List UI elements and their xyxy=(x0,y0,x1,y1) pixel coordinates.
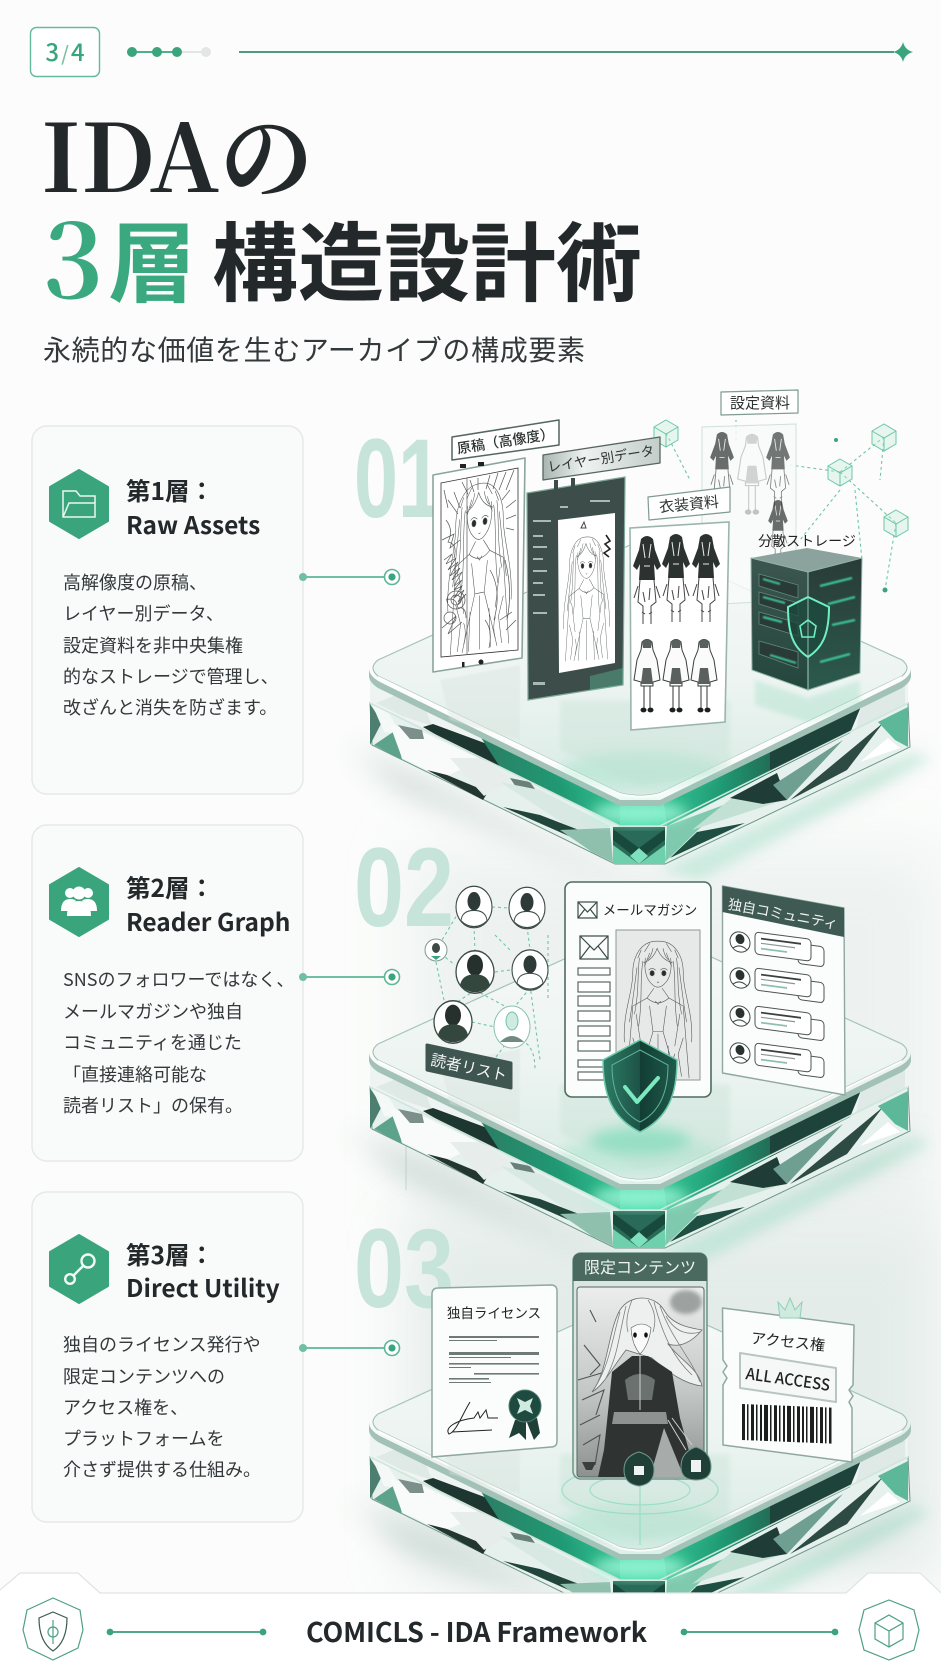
label: reader list: 読者リスト xyxy=(429,1048,509,1086)
title: 3 xyxy=(43,182,104,328)
illustration: layer 3 glass platform xyxy=(350,1297,930,1639)
card: limited content xyxy=(573,1253,711,1486)
panel: layer 3 description xyxy=(32,1192,303,1522)
body text: アクセス権を、 xyxy=(63,1394,188,1420)
body text: メールマガジンや独自 xyxy=(63,998,243,1024)
heading: Direct Utility xyxy=(126,1270,280,1305)
body text xyxy=(63,966,294,1118)
seal xyxy=(509,1390,541,1440)
icon: lock left xyxy=(624,1452,654,1486)
connector 3 xyxy=(299,1340,400,1356)
body text: 独自のライセンス発行や xyxy=(63,1331,261,1357)
label: costume sheet: 衣装資料 xyxy=(658,491,720,517)
heading xyxy=(126,1237,280,1305)
body text: 的なストレージで管理し、 xyxy=(63,663,279,689)
body text: 設定資料を非中央集権 xyxy=(63,632,243,658)
footer band xyxy=(0,1573,941,1672)
heading: Raw Assets xyxy=(126,507,260,542)
body text xyxy=(63,569,279,720)
card: community: 独自コミュニティ xyxy=(727,894,839,934)
number 02: 02 xyxy=(354,825,454,950)
header rule with star xyxy=(239,42,913,62)
icon: people xyxy=(50,868,108,936)
heading xyxy=(126,870,290,939)
card: limited content: 限定コンテンツ xyxy=(584,1254,696,1278)
heading: 第3層： xyxy=(126,1237,214,1272)
body text: レイヤー別データ、 xyxy=(63,600,224,626)
body text: SNSのフォロワーではなく、 xyxy=(63,966,294,992)
icon: cube badge xyxy=(859,1600,919,1660)
progress dots xyxy=(127,47,211,57)
illustration: layer 1 glass platform xyxy=(350,543,930,885)
rule right xyxy=(681,1629,838,1635)
icon: link xyxy=(50,1235,108,1303)
body text: 限定コンテンツへの xyxy=(63,1363,225,1389)
label: manuscript: 原稿（高像度） xyxy=(456,423,555,458)
icon: crown xyxy=(778,1298,802,1318)
subtitle: 永続的な価値を生むアーカイブの構成要素 xyxy=(43,329,586,369)
heading: Reader Graph xyxy=(126,904,290,939)
illustration: layer 2 glass platform xyxy=(350,927,930,1269)
pill: all access: ALL ACCESS xyxy=(744,1360,832,1396)
card: access ticket xyxy=(722,1298,854,1462)
body text: 介さず提供する仕組み。 xyxy=(63,1456,261,1482)
label: distributed storage: 分散ストレージ xyxy=(758,531,856,551)
illustration: layer 1 network nodes xyxy=(654,420,908,592)
title: 構造設計術 xyxy=(212,194,642,319)
heading: mail magazine: メールマガジン xyxy=(603,899,697,919)
label: settings material: 設定資料 xyxy=(730,392,790,413)
number 03: 03 xyxy=(354,1206,454,1331)
body text: 「直接連絡可能な xyxy=(63,1061,207,1087)
body text: 高解像度の原稿、 xyxy=(63,569,207,595)
body text xyxy=(63,1331,261,1482)
card: community xyxy=(722,886,845,1095)
label: layer data: レイヤー別データ xyxy=(546,439,655,476)
card: layered data xyxy=(527,437,660,700)
title xyxy=(41,84,642,328)
heading: 第1層： xyxy=(126,473,214,508)
title: IDAの xyxy=(41,84,313,219)
body text: 読者リスト」の保有。 xyxy=(63,1092,243,1118)
icon: check shield xyxy=(590,1040,690,1154)
heading: access rights: アクセス権 xyxy=(750,1327,826,1356)
icon: lock right xyxy=(681,1447,711,1480)
icon: storage server with shield xyxy=(751,531,862,722)
card: manuscript xyxy=(433,420,559,672)
header bar xyxy=(30,28,913,76)
footer title: COMICLS - IDA Framework xyxy=(306,1611,648,1650)
page badge: 3/4 xyxy=(45,33,85,68)
rule left xyxy=(107,1629,266,1635)
panel: layer 1 description xyxy=(32,426,303,794)
card: character sheets back xyxy=(702,390,798,605)
page badge xyxy=(30,28,100,76)
number 01: 01 xyxy=(354,416,442,541)
icon: shield badge xyxy=(23,1598,83,1660)
label: settings material xyxy=(721,390,798,415)
card: character designs xyxy=(630,487,730,730)
heading: license: 独自ライセンス xyxy=(447,1302,541,1322)
label: costume sheet xyxy=(648,487,730,520)
signature xyxy=(448,1402,498,1434)
connector 2 xyxy=(299,970,400,984)
illustration: hologram rings xyxy=(562,1466,718,1545)
card: newsletter xyxy=(565,882,711,1097)
card: license xyxy=(432,1285,557,1457)
icon: folder xyxy=(50,470,108,538)
barcode xyxy=(742,1404,832,1444)
panel: layer 2 description xyxy=(32,825,303,1161)
illustration: reader network xyxy=(425,886,548,1088)
body text: 改ざんと消失を防ざます。 xyxy=(63,694,277,720)
body text: プラットフォームを xyxy=(63,1425,224,1451)
heading: 第2層： xyxy=(126,870,214,905)
title: 層 xyxy=(108,194,196,321)
heading xyxy=(126,473,260,542)
body text: コミュニティを通じた xyxy=(63,1029,242,1055)
icon: envelope xyxy=(578,902,597,918)
connector 1 xyxy=(299,570,400,584)
